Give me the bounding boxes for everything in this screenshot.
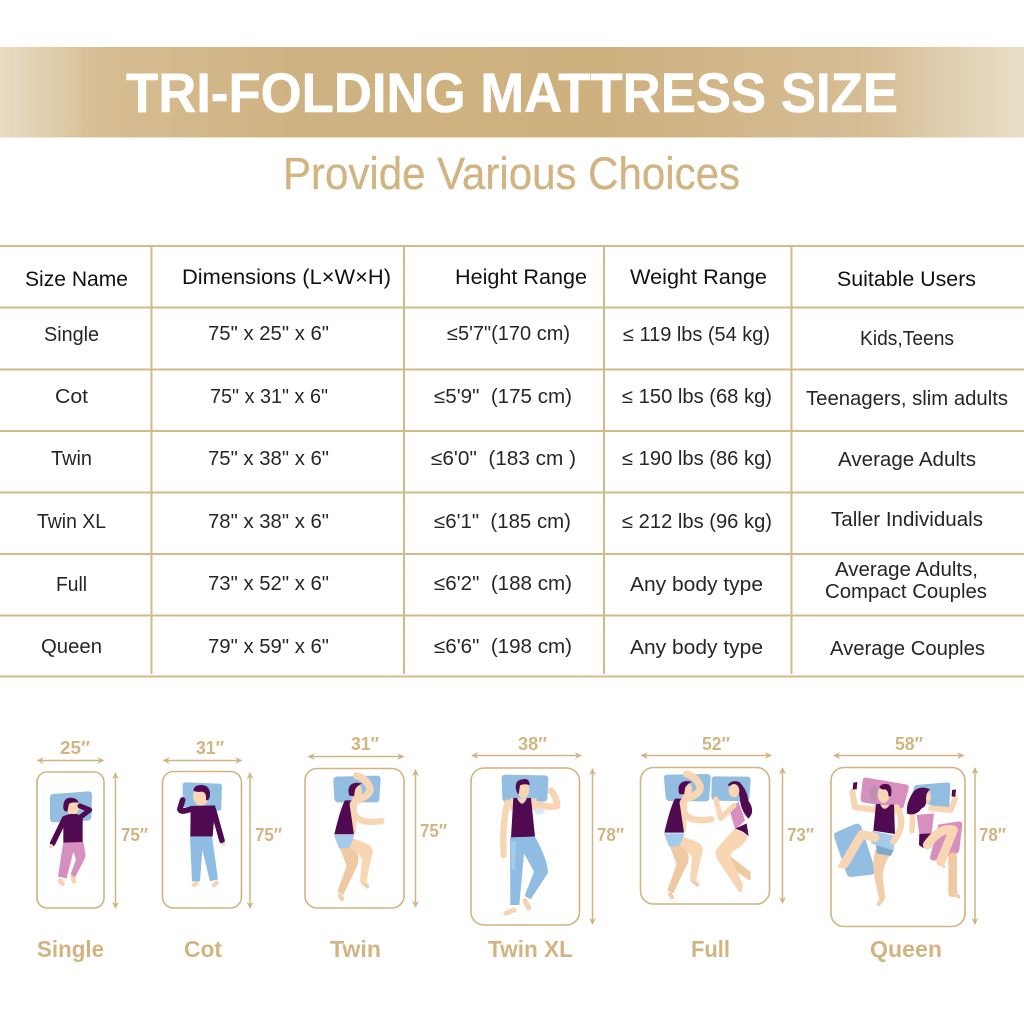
icon: teen sleeping [180,782,225,885]
diagram: Cot: 31″ [196,738,224,758]
row: Full: ≤6'2" (188 cm) [434,573,572,595]
label: Twin XL: Twin XL [488,936,573,962]
row: Single [44,323,954,350]
row: Twin XL: Taller Individuals [831,509,983,531]
diagram: Full: 52″ [702,734,730,754]
diagram: Single: 25″ [60,738,90,758]
diagram: Queen: 58″ [895,734,923,754]
diagram: Twin [305,734,447,908]
row: Cot: ≤ 150 lbs (68 kg) [622,386,772,408]
row: Single: Single [44,324,99,346]
table header row: Dimensions (L×W×H) [182,266,391,289]
row: Twin XL: ≤ 212 lbs (96 kg) [622,511,772,533]
label: Full: Full [691,936,730,962]
diagram: Queen [831,734,1006,926]
icon: tall adult sleeping [502,775,557,913]
diagram: Twin XL: 38″ [518,734,547,754]
icon: adult side sleeper [333,776,381,899]
row: Queen: Queen [41,636,102,658]
row: Full: Compact Couples [825,581,987,603]
woman [907,788,959,897]
icon: couple sleeping [664,774,752,897]
diagram: Cot: 75″ [255,825,282,845]
diagram: Cot [162,738,282,908]
diagram: Full: 73″ [787,825,814,845]
row: Queen: 79" x 59" x 6" [208,636,329,658]
diagram: Twin XL: 78″ [597,825,624,845]
row: Cot: ≤5'9" (175 cm) [434,386,572,408]
row: Twin: Average Adults [838,449,976,471]
table header row: Suitable Users [837,268,976,291]
row: Twin XL: Twin XL [37,511,106,533]
row: Twin: Twin [51,448,92,470]
diagram: Twin XL [471,734,624,925]
woman [716,781,752,891]
row: Single: ≤ 119 lbs (54 kg) [623,324,770,346]
row: Twin XL [37,509,983,533]
row: Queen [41,636,985,660]
title banner [0,47,1024,138]
table header row: Height Range [455,266,587,289]
label: Cot: Cot [184,936,222,962]
icon: child sleeping [49,791,92,884]
row: Full: Full [56,574,87,596]
diagram: Twin: 75″ [420,821,447,841]
row: Full [56,559,987,603]
man [839,782,901,904]
row: Queen: ≤6'6" (198 cm) [434,636,572,658]
title: TRI-FOLDING MATTRESS SIZE [126,61,898,124]
row: Single: Kids,Teens [860,328,954,350]
row: Single: 75" x 25" x 6" [208,323,329,345]
row: Cot: Teenagers, slim adults [806,388,1008,410]
row: Twin XL: ≤6'1" (185 cm) [434,511,571,533]
table header row: Weight Range [630,266,767,289]
row: Twin: 75" x 38" x 6" [208,448,329,470]
row: Cot: Cot [55,386,88,408]
row: Twin: ≤6'0" (183 cm ) [431,448,576,470]
diagram: Queen: 78″ [979,825,1006,845]
row: Cot [55,386,1008,410]
subtitle: Provide Various Choices [283,148,740,199]
label: Twin: Twin [330,936,381,962]
diagram: Single: 75″ [121,825,148,845]
diagram: Full [640,734,814,904]
table header row: Size Name [25,268,128,291]
table header row [25,266,976,291]
row: Queen: Average Couples [830,638,985,660]
row: Full: Any body type [630,574,763,596]
label: Single: Single [37,936,104,962]
row: Full: 73" x 52" x 6" [208,573,329,595]
row: Twin: ≤ 190 lbs (86 kg) [622,448,772,470]
label: Queen: Queen [870,936,942,962]
row: Single: ≤5'7"(170 cm) [447,323,570,345]
diagram: Twin: 31″ [351,734,379,754]
diagram: Single [37,738,148,908]
row: Twin XL: 78" x 38" x 6" [208,511,329,533]
row: Queen: Any body type [630,637,763,659]
row: Twin [51,448,976,471]
man [664,774,711,897]
row: Full: Average Adults, [835,559,978,581]
row: Cot: 75" x 31" x 6" [210,386,328,408]
icon: couple with phones [834,778,962,904]
size table [0,245,1024,676]
